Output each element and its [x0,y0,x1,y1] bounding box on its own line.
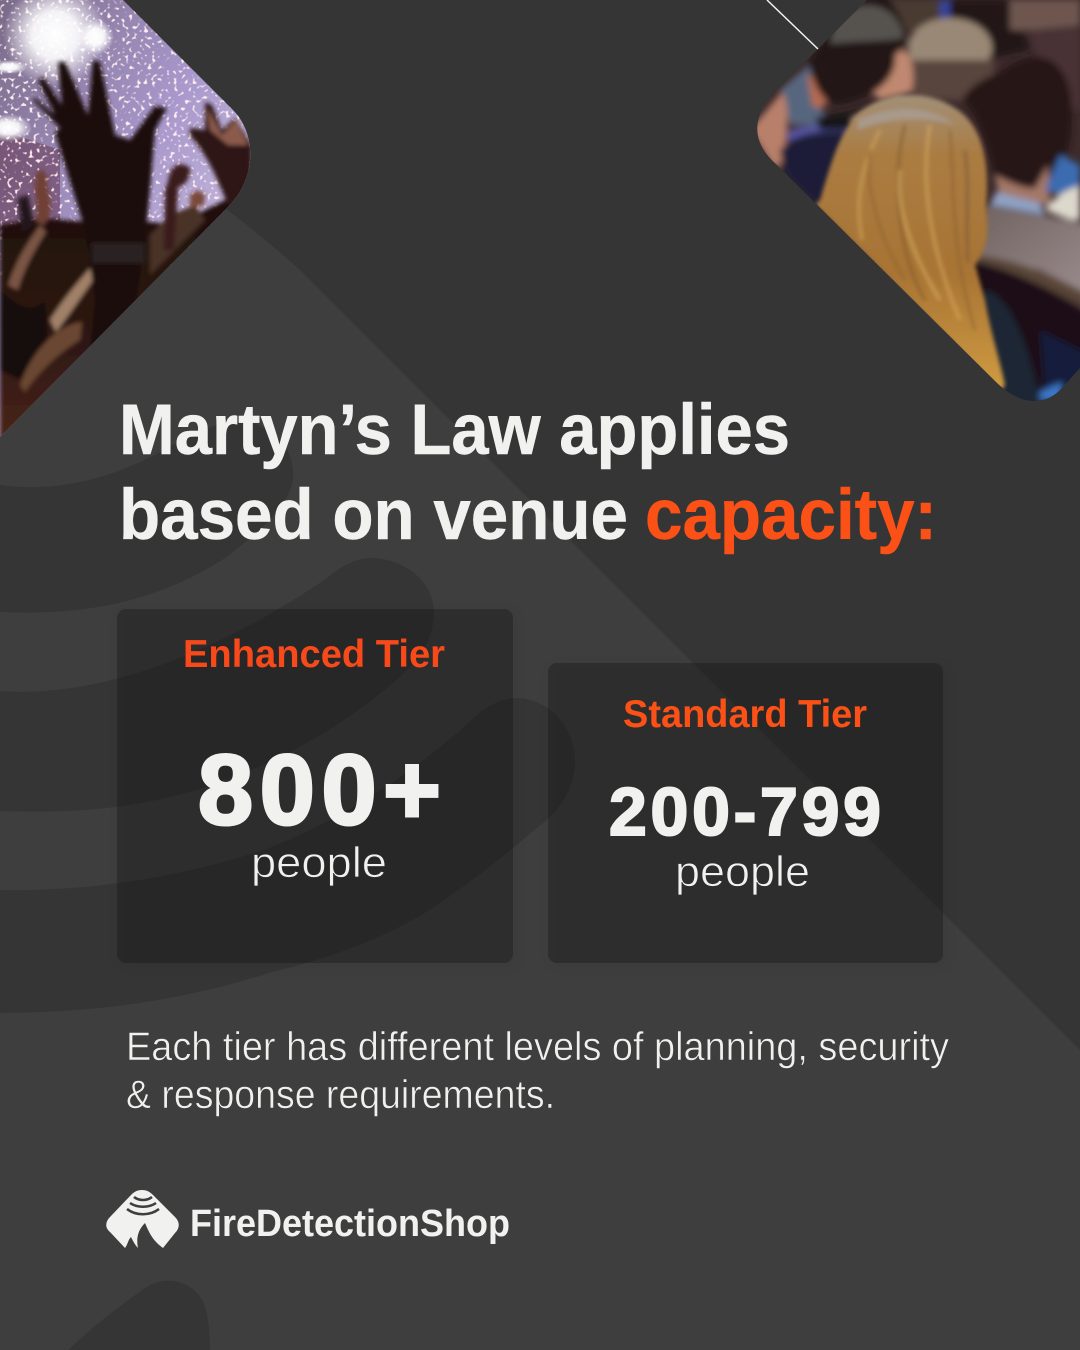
standard tier heading: Standard Tier [623,693,867,736]
title: Martyn’s Law applies [119,391,790,470]
enhanced tier number: 800+ [198,734,441,845]
photo: concert crowd [0,0,260,440]
title [119,391,937,555]
body text: Each tier has different levels of planning, security [126,1025,949,1069]
body text: & response requirements. [126,1073,555,1117]
standard tier unit: people [675,848,810,896]
title: capacity: [645,476,937,555]
panel: enhanced tier [117,609,513,963]
logo [106,1190,510,1248]
standard tier number: 200-799 [609,774,881,850]
panel: standard tier [548,663,943,963]
icon: flame and signal diamond [106,1190,179,1248]
photo: seated audience [750,0,1080,410]
enhanced tier unit: people [251,839,387,887]
body text [126,1025,949,1117]
logo wordmark: FireDetectionShop [190,1203,510,1245]
white diagonal line [767,0,818,49]
title: based on venue [119,476,628,555]
enhanced tier heading: Enhanced Tier [183,633,445,676]
